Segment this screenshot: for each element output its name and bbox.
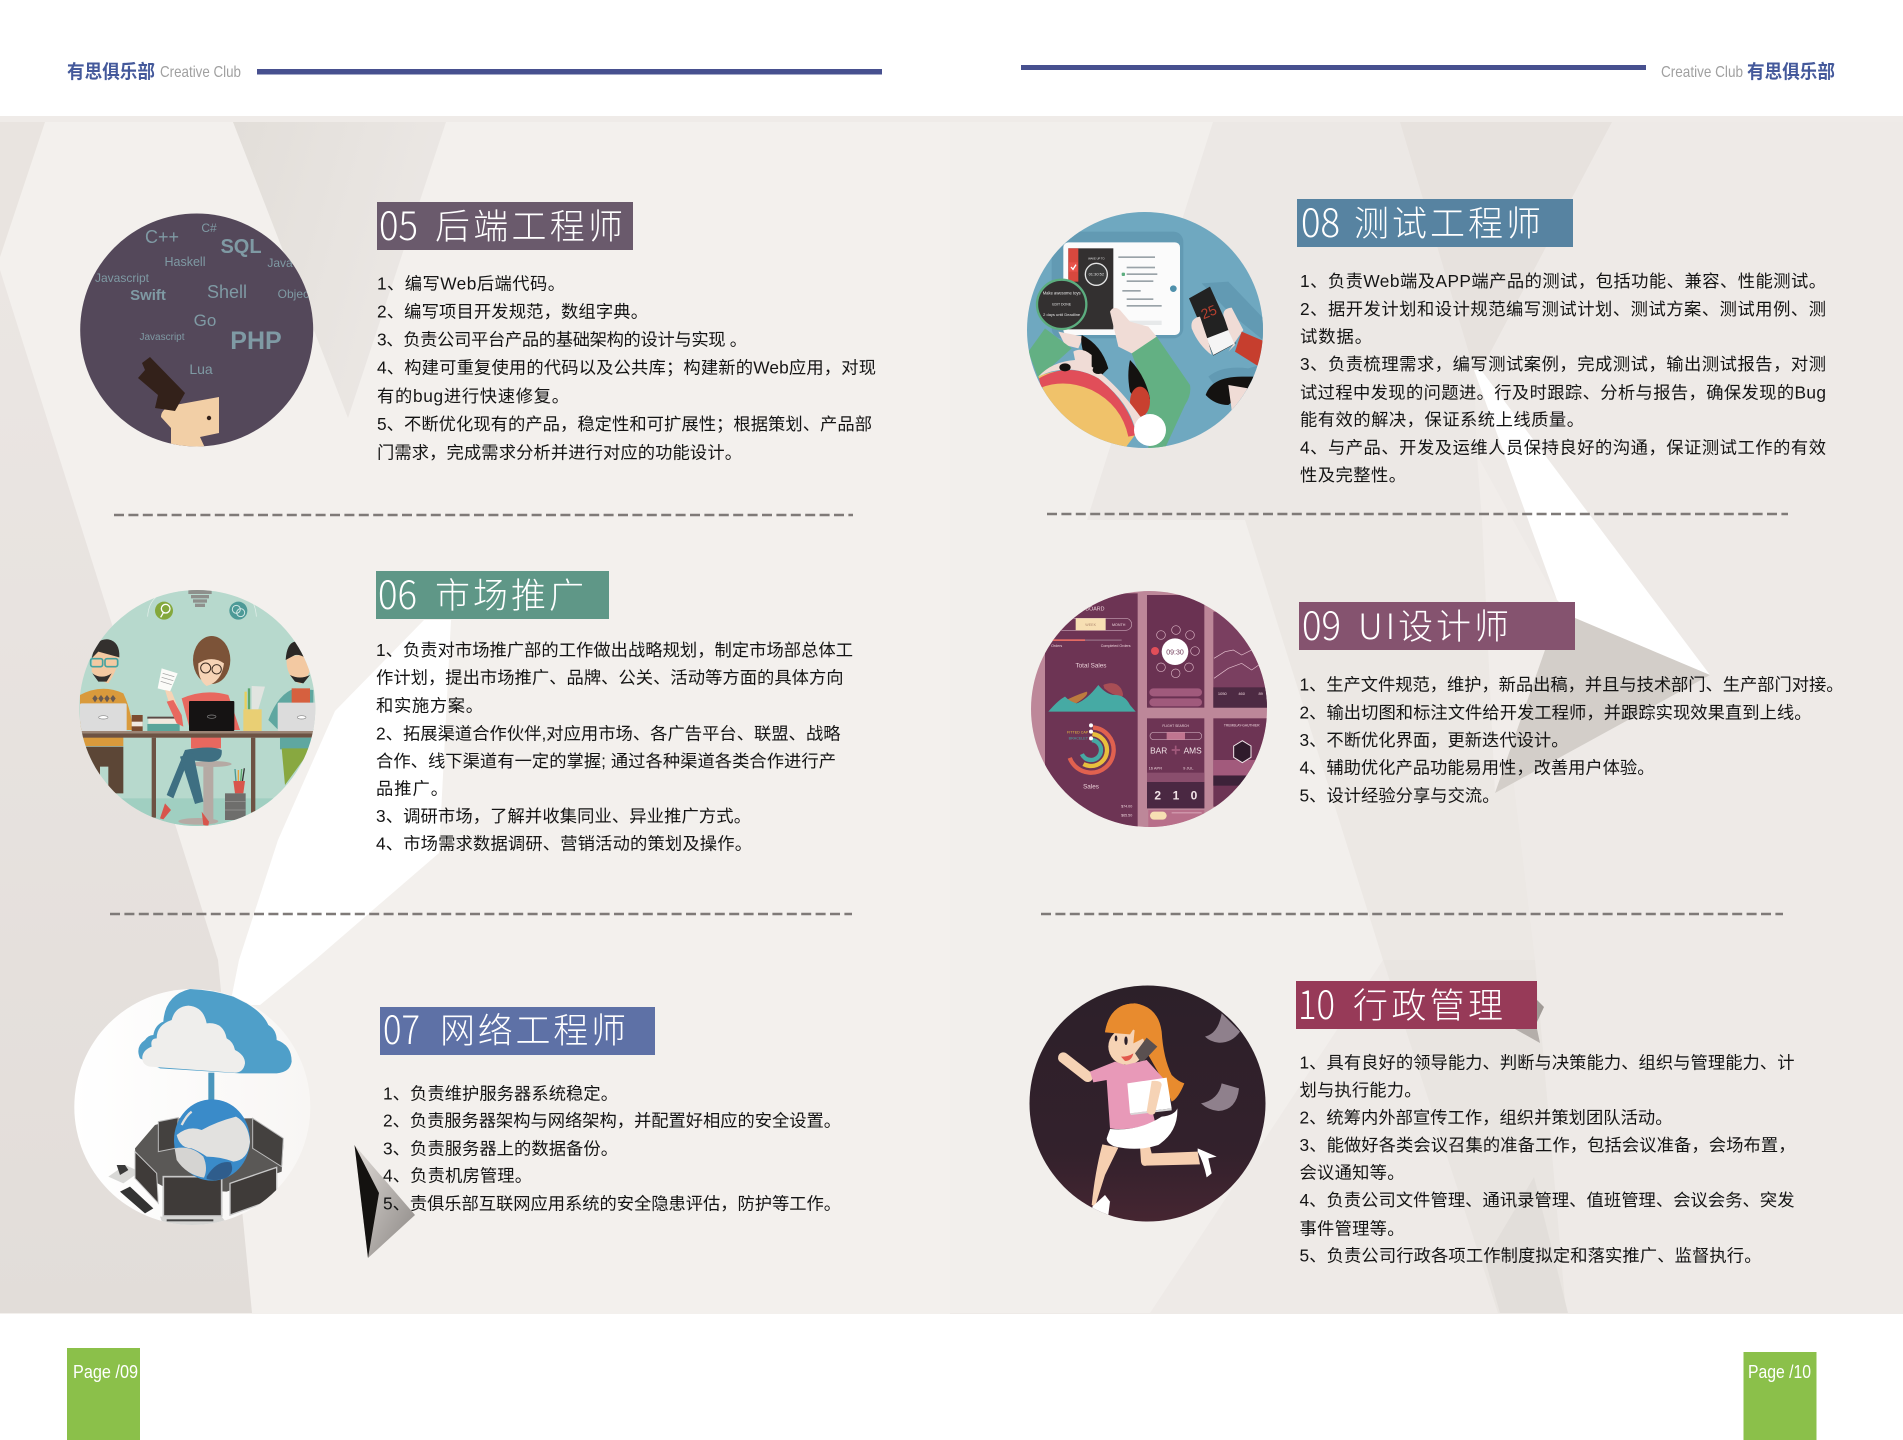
title: 07: 网络工程师 bbox=[440, 1003, 626, 1054]
icon: programmer with languages: PHP bbox=[230, 327, 282, 355]
title: 10: 10 bbox=[1298, 975, 1335, 1031]
text block: 06 duties: 合作、线下渠道有一定的掌握; 通过各种渠道各类合作进行产 bbox=[376, 751, 836, 771]
icon: programmer with languages: Javascript bbox=[95, 271, 150, 285]
icon: programmer with languages: C++ bbox=[145, 227, 179, 247]
panel: 05 backend engineer bbox=[70, 196, 876, 462]
icon: app screens: 0 bbox=[1191, 788, 1198, 802]
icon: app screens: TREMBLAY-GAUTHIER bbox=[1224, 724, 1260, 728]
text block: 05 duties: 4、构建可重复使用的代码以及公共库；构建新的Web应用，对现 bbox=[377, 358, 876, 378]
title: 09: 09 bbox=[1302, 596, 1341, 652]
title: 06: 市场推广 bbox=[435, 568, 584, 619]
page tab right: Page /10 bbox=[1748, 1362, 1811, 1382]
text block: 08 duties: 试过程中发现的问题进。行及时跟踪、分析与报告，确保发现的Bug bbox=[1300, 382, 1826, 402]
text block: 06 duties: 作计划，提出市场推广、品牌、公关、活动等方面的具体方向 bbox=[376, 668, 844, 688]
icon: programmer with languages: Swift bbox=[130, 287, 166, 304]
icon: programmer with languages: Lua bbox=[189, 361, 213, 377]
icon: people using tablet and phone: EDIT DONE bbox=[1052, 303, 1072, 307]
title: 05 bbox=[377, 196, 633, 252]
icon: programmer with languages: C# bbox=[201, 221, 217, 235]
icon: people using tablet and phone: 01:30:52 bbox=[1089, 272, 1105, 277]
icon: app screens: 2 bbox=[1154, 788, 1161, 802]
text block: 05 duties: 5、不断优化现有的产品，稳定性和可扩展性；根据策划、产品部 bbox=[377, 414, 872, 434]
divider right 1 bbox=[1047, 513, 1788, 515]
header left: club name and rule bbox=[67, 60, 882, 83]
icon: app screens: $74.00 bbox=[1121, 804, 1132, 808]
divider right 2 bbox=[1041, 913, 1783, 915]
icon: people using tablet and phone: Make awesome toys bbox=[1043, 290, 1081, 295]
text block: 06 duties: 品推广。 bbox=[376, 779, 448, 799]
title: 09 bbox=[1299, 596, 1575, 652]
icon: programmer with languages: SQL bbox=[220, 236, 262, 258]
text block: 08 duties: 3、负责梳理需求，编写测试案例，完成测试，输出测试报告，对测 bbox=[1300, 354, 1826, 374]
icon: app screens: WEEK bbox=[1085, 623, 1097, 627]
text block: 09 duties: 3、不断优化界面，更新迭代设计。 bbox=[1300, 730, 1568, 750]
title: 06: 06 bbox=[378, 565, 417, 621]
divider left 1 bbox=[114, 514, 853, 516]
title: 08 bbox=[1297, 193, 1573, 249]
text block: 06 duties: 1、负责对市场推广部的工作做出战略规划，制定市场部总体工 bbox=[376, 640, 853, 660]
icon: app screens: Sales bbox=[1083, 784, 1099, 791]
icon: three people at a desk bbox=[79, 590, 316, 826]
icon: app screens: BOARD bbox=[1086, 606, 1105, 612]
icon: programmer with languages: Object bbox=[278, 287, 313, 301]
icon: running woman on phone bbox=[1025, 982, 1270, 1227]
panel: 08 test engineer bbox=[1015, 193, 1826, 485]
title: 06 bbox=[376, 565, 609, 621]
icon: app screens: BAR bbox=[1150, 745, 1167, 755]
icon: app screens bbox=[1031, 591, 1267, 827]
text block: 07 duties: 1、负责维护服务器系统稳定。 bbox=[383, 1083, 618, 1103]
text block: 06 duties bbox=[376, 640, 853, 853]
icon: app screens: 9 JUL bbox=[1183, 765, 1194, 770]
icon: app screens: 1050 bbox=[1218, 691, 1228, 696]
text block: 08 duties: 4、与产品、开发及运维人员保持良好的沟通，保证测试工作的有效 bbox=[1300, 437, 1826, 457]
icon: programmer with languages: Javascript bbox=[139, 332, 185, 343]
text block: 08 duties bbox=[1300, 271, 1826, 485]
text block: 10 duties: 4、负责公司文件管理、通讯录管理、值班管理、会议会务、突发 bbox=[1300, 1190, 1794, 1210]
header right: rule and club name bbox=[1021, 60, 1835, 83]
text block: 06 duties: 4、市场需求数据调研、营销活动的策划及操作。 bbox=[376, 833, 752, 853]
icon: programmer with languages: Java bbox=[267, 256, 293, 270]
panel: 10 administration bbox=[1025, 975, 1796, 1266]
icon: app screens: FITTED CAP bbox=[1067, 730, 1089, 734]
text block: 08 duties: 1、负责Web端及APP端产品的测试，包括功能、兼容、性能测试。 bbox=[1300, 271, 1826, 291]
panel: 09 UI designer bbox=[1031, 591, 1832, 827]
icon: app screens: 09:30 bbox=[1166, 649, 1184, 656]
text block: 06 duties: 和实施方案。 bbox=[376, 695, 483, 715]
title: 07: 07 bbox=[383, 1000, 420, 1056]
text block: 09 duties: 1、生产文件规范，维护，新品出稿，并且与技术部门、生产部门对接。 bbox=[1300, 674, 1844, 694]
text block: 10 duties bbox=[1300, 1052, 1796, 1266]
text block: 09 duties: 5、设计经验分享与交流。 bbox=[1300, 785, 1500, 805]
icon: app screens: 16 APR bbox=[1149, 765, 1162, 770]
icon: app screens: BRACELET bbox=[1069, 737, 1089, 741]
text block: 08 duties: 能有效的解决，保证系统上线质量。 bbox=[1300, 409, 1584, 429]
header left: club name and rule: 有思俱乐部 bbox=[67, 60, 155, 83]
panel: 07 network engineer bbox=[70, 985, 841, 1258]
decorative shard: behind title bbox=[1515, 1000, 1544, 1043]
icon: app screens: Orders bbox=[1051, 644, 1062, 648]
panel: 06 marketing bbox=[65, 565, 853, 853]
title: 05: 后端工程师 bbox=[435, 199, 623, 250]
text block: 08 duties: 2、据开发计划和设计规范编写测试计划、测试方案、测试用例、测 bbox=[1300, 299, 1826, 319]
icon: app screens: 460 bbox=[1238, 691, 1246, 696]
header right: rule and club name: 有思俱乐部 bbox=[1747, 60, 1835, 83]
icon: people using tablet and phone: WAKE UP TO bbox=[1088, 256, 1105, 260]
page tab left bbox=[67, 1348, 140, 1440]
text block: 10 duties: 事件管理等。 bbox=[1300, 1218, 1404, 1238]
icon: programmer with languages bbox=[80, 214, 314, 446]
title: 09: UI设计师 bbox=[1358, 599, 1509, 650]
text block: 05 duties: 2、编写项目开发规范，数组字典。 bbox=[377, 302, 648, 322]
icon: app screens: 1 bbox=[1173, 788, 1180, 802]
text block: 06 duties: 2、拓展渠道合作伙伴,对应用市场、各广告平台、联盟、战略 bbox=[376, 723, 841, 743]
title: 08: 08 bbox=[1301, 193, 1340, 249]
icon: programmer with languages: Shell bbox=[207, 282, 247, 302]
text block: 10 duties: 1、具有良好的领导能力、判断与决策能力、组织与管理能力、计 bbox=[1300, 1052, 1794, 1072]
icon: app screens: FLIGHT SEARCH bbox=[1162, 724, 1190, 728]
text block: 08 duties: 试数据。 bbox=[1300, 327, 1372, 347]
header right: rule and club name: Creative Club bbox=[1661, 64, 1743, 81]
text block: 10 duties: 5、负责公司行政各项工作制度拟定和落实推广、监督执行。 bbox=[1300, 1246, 1762, 1266]
page tab left: Page /09 bbox=[73, 1362, 138, 1382]
text block: 07 duties: 2、负责服务器架构与网络架构，并配置好相应的安全设置。 bbox=[383, 1111, 841, 1131]
text block: 05 duties: 门需求，完成需求分析并进行对应的功能设计。 bbox=[377, 442, 742, 462]
text block: 05 duties: 1、编写Web后端代码。 bbox=[377, 273, 565, 293]
header left: club name and rule: Creative Club bbox=[160, 64, 241, 81]
text block: 10 duties: 会议通知等。 bbox=[1300, 1163, 1404, 1183]
text block: 05 duties bbox=[377, 273, 876, 462]
page tab right bbox=[1744, 1352, 1816, 1440]
icon: app screens: $65.50 bbox=[1121, 814, 1132, 818]
text block: 07 duties: 3、负责服务器上的数据备份。 bbox=[383, 1138, 618, 1158]
icon: app screens: AMS bbox=[1184, 745, 1202, 755]
icon: app screens: MONTH bbox=[1112, 623, 1126, 627]
icon: programmer with languages: Go bbox=[194, 311, 216, 330]
icon: people using tablet and phone: 25 bbox=[1198, 301, 1219, 322]
text block: 08 duties: 性及完整性。 bbox=[1300, 465, 1406, 485]
text block: 07 duties: 4、负责机房管理。 bbox=[383, 1166, 532, 1186]
title: 05: 05 bbox=[379, 196, 418, 252]
icon: app screens: Completed Orders bbox=[1101, 644, 1131, 648]
text block: 10 duties: 2、统筹内外部宣传工作，组织并策划团队活动。 bbox=[1300, 1108, 1672, 1128]
text block: 05 duties: 3、负责公司平台产品的基础架构的设计与实现 。 bbox=[377, 329, 747, 349]
text block: 09 duties: 4、辅助优化产品功能易用性，改善用户体验。 bbox=[1300, 758, 1654, 778]
text block: 10 duties: 划与执行能力。 bbox=[1300, 1080, 1422, 1100]
text block: 07 duties bbox=[383, 1083, 841, 1213]
decorative shard: dark triangle bbox=[354, 1145, 415, 1258]
text block: 06 duties: 3、调研市场，了解并收集同业、异业推广方式。 bbox=[376, 806, 751, 826]
icon: app screens: 89 bbox=[1258, 691, 1264, 696]
text block: 05 duties: 有的bug进行快速修复。 bbox=[377, 386, 569, 406]
icon: app screens: Total Sales bbox=[1076, 662, 1106, 669]
title: 08: 测试工程师 bbox=[1354, 196, 1541, 247]
text block: 09 duties bbox=[1300, 674, 1844, 805]
icon: people using tablet and phone: 2 days until Deadline bbox=[1043, 312, 1081, 317]
text block: 09 duties: 2、输出切图和标注文件给开发工程师，并跟踪实现效果直到上线。 bbox=[1300, 702, 1812, 722]
icon: programmer with languages: Haskell bbox=[164, 255, 206, 269]
text block: 10 duties: 3、能做好各类会议召集的准备工作，包括会议准备，会场布置， bbox=[1300, 1135, 1796, 1155]
divider left 2 bbox=[110, 913, 852, 915]
title: 07 bbox=[380, 1000, 655, 1056]
text block: 07 duties: 5、责俱乐部互联网应用系统的安全隐患评估，防护等工作。 bbox=[383, 1193, 841, 1213]
title: 10 bbox=[1296, 975, 1537, 1031]
title: 10: 行政管理 bbox=[1353, 978, 1503, 1029]
icon: people using tablet and phone bbox=[1027, 212, 1263, 448]
icon: cloud, globe and monitors bbox=[74, 989, 292, 1225]
